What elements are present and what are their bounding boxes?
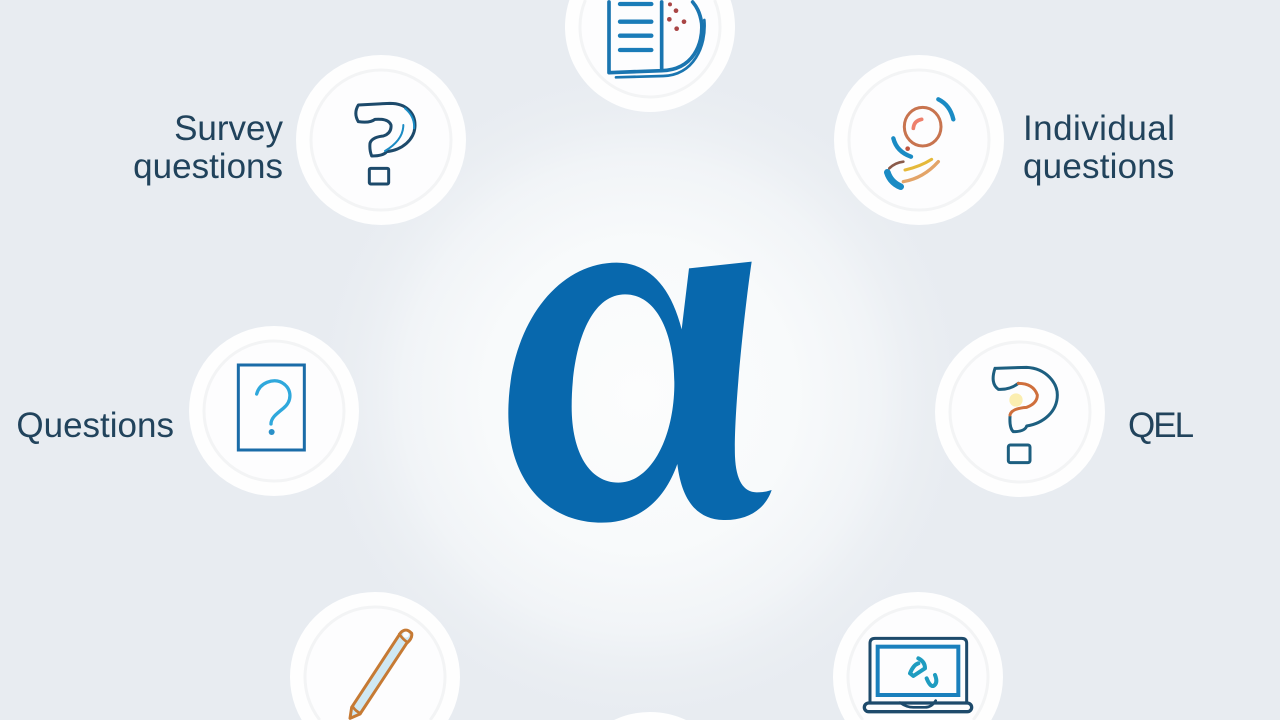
label: survey questions: questions xyxy=(133,147,283,186)
pen badge xyxy=(290,592,460,720)
icon: document with dots xyxy=(609,2,705,77)
survey questions badge xyxy=(296,55,466,225)
node: questions xyxy=(16,326,359,496)
label: QEL: QEL xyxy=(1128,406,1194,445)
label: survey questions: Survey xyxy=(174,109,283,148)
laptop badge xyxy=(833,592,1003,720)
central alpha symbol xyxy=(508,262,772,523)
icon: outlined question mark xyxy=(356,103,415,184)
top node badge xyxy=(565,0,735,112)
icon: question mark in frame xyxy=(238,365,304,450)
icon: hand holding ball xyxy=(887,99,953,187)
node: top document xyxy=(565,0,735,112)
label: individual questions: questions xyxy=(1023,147,1175,186)
questions badge xyxy=(189,326,359,496)
icon: pen xyxy=(350,630,412,718)
node: QEL xyxy=(935,327,1194,497)
QEL badge xyxy=(935,327,1105,497)
node: individual questions xyxy=(834,55,1175,225)
node: survey questions xyxy=(133,55,466,225)
label: individual questions: Individual xyxy=(1023,109,1175,148)
node: pen xyxy=(290,592,460,720)
node: bottom badge xyxy=(614,712,686,720)
node: laptop xyxy=(833,592,1003,720)
individual questions badge xyxy=(834,55,1004,225)
icon: orange accent question mark xyxy=(993,367,1057,463)
icon: laptop xyxy=(864,638,972,712)
label: questions: Questions xyxy=(16,406,174,445)
